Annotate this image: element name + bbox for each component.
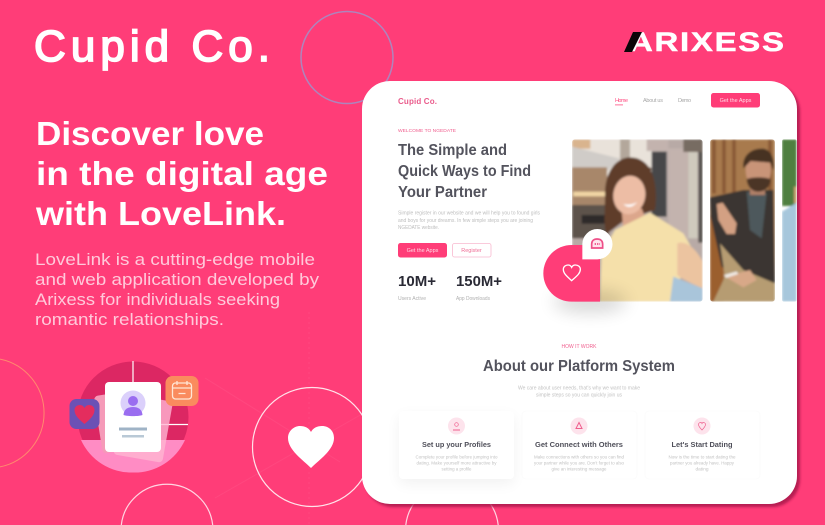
icon: avatar [120, 390, 146, 416]
feature card: connect: Make connections with others so you can find [534, 454, 624, 460]
headline: Discover love [36, 115, 264, 152]
decorative circle: bottom under card [406, 484, 498, 525]
icon: heart [694, 418, 710, 434]
decorative circle with heart [252, 388, 372, 506]
decorative circle: bottom left [121, 484, 213, 525]
stat: downloads: App Downloads [456, 296, 490, 302]
mockup navigation [615, 98, 691, 105]
hero heading [398, 142, 531, 201]
description paragraph: Arixess for individuals seeking [35, 290, 280, 309]
logo: Arixess: ARIXESS [629, 28, 784, 57]
description paragraph: romantic relationships. [35, 310, 224, 329]
stat: users [398, 274, 436, 302]
chat bubble badge [582, 229, 612, 259]
headline: with LoveLink. [35, 195, 286, 232]
nav button [711, 93, 760, 108]
feature card: connect: give an interesting message [552, 466, 607, 472]
button: get the apps [398, 243, 447, 258]
description paragraph: LoveLink is a cutting-edge mobile [35, 250, 315, 269]
feature card: dating: Let's Start Dating [672, 440, 733, 449]
decorative circle: left [0, 359, 44, 467]
heart badge [543, 245, 627, 312]
decorative faint background lines [205, 312, 362, 525]
button: register [452, 244, 491, 257]
photo: third person [782, 139, 797, 302]
stat: downloads [456, 274, 502, 302]
section description [518, 386, 640, 398]
decorative circle: top [301, 12, 393, 104]
stat: downloads: 150M+ [456, 274, 502, 290]
feature card: dating: partner you already have. Happy [670, 460, 735, 466]
button: register: Register [461, 248, 482, 254]
button: get the apps: Get the Apps [407, 248, 439, 254]
feature card: dating [645, 411, 760, 479]
photo: woman [572, 139, 703, 302]
illustration: profile card [70, 361, 198, 473]
hero description: Simple register in our website and we will help you to found girls [398, 210, 540, 216]
feature card: connect: your partner while you are. Don't forget to also [534, 460, 624, 466]
mockup navigation: About us [643, 98, 663, 104]
section description: simple steps so you can quickly join us [536, 392, 622, 398]
feature card: profiles: dating. Make yourself more attractive by [416, 460, 497, 466]
feature card: profiles: setting a profile [442, 466, 472, 472]
hero heading: Your Partner [398, 184, 487, 201]
feature card: profiles: Complete your profile before jumping into [416, 454, 498, 460]
headline [35, 115, 328, 232]
icon: heart outline [563, 265, 580, 281]
hero heading: Quick Ways to Find [398, 163, 531, 180]
icon: connect [570, 418, 588, 434]
hero heading: The Simple and [398, 142, 507, 159]
card shadow [365, 84, 800, 507]
feature card: profiles [399, 411, 514, 484]
icon: calendar tile [166, 376, 198, 406]
photo: man [710, 139, 775, 302]
stat: users: Users Active [398, 296, 426, 302]
panel: website mockup [362, 81, 797, 504]
mockup navigation: Demo [678, 98, 691, 104]
icon: chat [592, 239, 603, 248]
stat: users: 10M+ [398, 274, 436, 290]
hero description: and boys for your dreams. In few simple steps you are joining [398, 218, 533, 224]
description paragraph: and web application developed by [35, 270, 320, 289]
feature card: profiles: Set up your Profiles [422, 440, 491, 449]
headline: in the digital age [36, 155, 328, 192]
nav button: Get the Apps [720, 98, 752, 104]
section description: We care about user needs, that's why we want to make [518, 386, 640, 392]
section eyebrow: HOW IT WORK [562, 344, 597, 350]
section heading: About our Platform System [483, 358, 675, 375]
icon: profile [448, 418, 465, 434]
hero description [398, 210, 540, 231]
feature card: dating: Now is the time to start dating the [668, 454, 736, 460]
eyebrow text: WELCOME TO NGEDATE [398, 128, 456, 134]
description paragraph [35, 250, 320, 329]
brand title: Cupid Co.: Cupid Co. [34, 22, 270, 71]
mockup logo: Cupid Co. [398, 97, 437, 106]
feature card: connect [522, 411, 637, 479]
feature card: dating: dating [696, 466, 709, 472]
icon: heart tile [70, 399, 100, 429]
hero description: NGEDATE website. [398, 225, 439, 231]
mockup navigation: Home [615, 98, 628, 104]
feature card: connect: Get Connect with Others [535, 440, 623, 449]
